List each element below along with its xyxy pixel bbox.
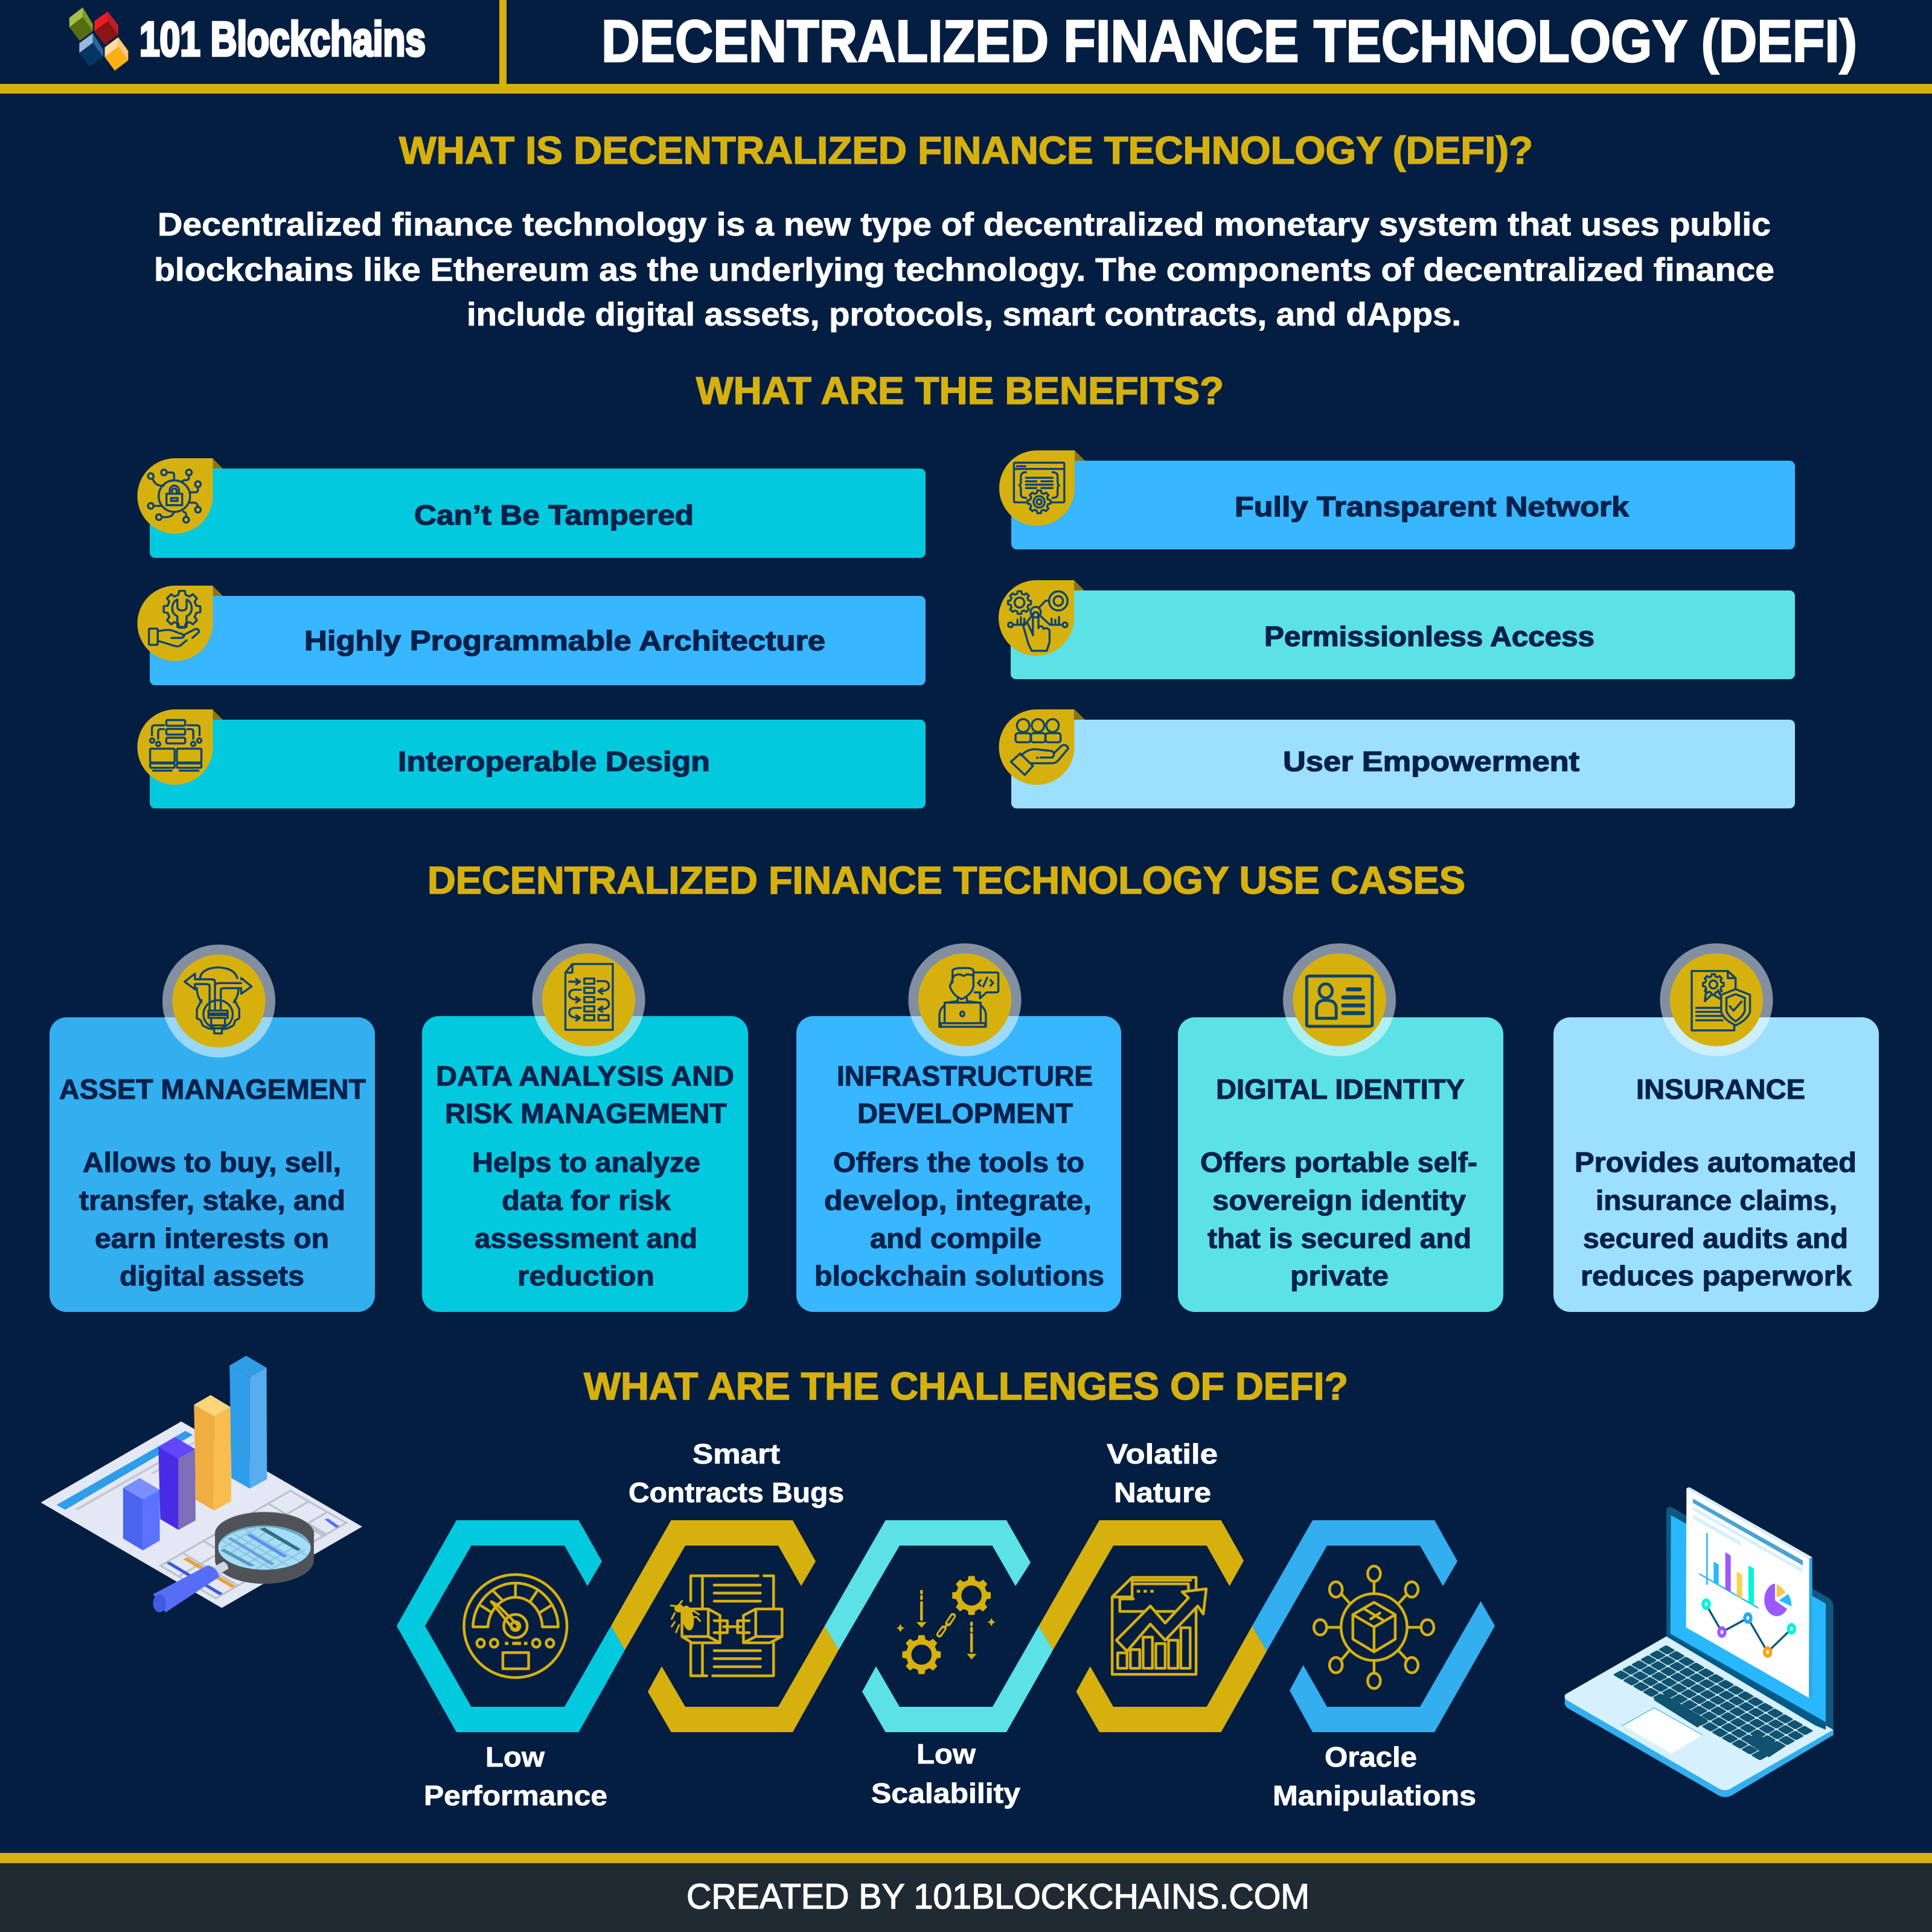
label: volatile nature — [1107, 1438, 1218, 1508]
icon: gears and chain — [897, 1576, 996, 1674]
icon: insurance document and shield — [1692, 971, 1750, 1031]
benefit: can't be tampered: Can’t Be Tampered — [414, 499, 694, 531]
hexagon: low performance — [397, 1520, 625, 1732]
benefit: permissionless: Permissionless Access — [1264, 621, 1595, 652]
logo — [69, 7, 426, 71]
card: infrastructure: develop, integrate, — [824, 1185, 1092, 1216]
logo wordmark: 101 Blockchains — [139, 12, 426, 66]
intro paragraph: Decentralized finance technology is a new type of decentralized monetary system that uses public — [158, 206, 1771, 243]
benefit: programmable: Highly Programmable Architecture — [304, 625, 825, 656]
benefit: user empowerment: User Empowerment — [1283, 746, 1579, 777]
label: volatile nature: Volatile — [1107, 1438, 1218, 1470]
label: low performance: Low — [485, 1741, 545, 1773]
intro paragraph — [154, 206, 1774, 333]
icon: document flow — [565, 964, 613, 1030]
card: data analysis: data for risk — [502, 1185, 671, 1216]
benefit: transparent — [999, 450, 1795, 549]
magnifier — [215, 1512, 314, 1584]
footer gold rule — [0, 1853, 1932, 1863]
card: asset management — [50, 944, 375, 1312]
label: low scalability: Scalability — [871, 1777, 1020, 1809]
panel: benefits — [138, 450, 1795, 808]
footer band — [0, 1863, 1932, 1932]
header divider — [499, 0, 507, 85]
card: asset management: Allows to buy, sell, — [83, 1147, 341, 1178]
illustration: isometric chart and magnifier — [41, 1356, 362, 1613]
card: asset management: transfer, stake, and — [79, 1185, 345, 1216]
benefit: permissionless — [999, 580, 1795, 679]
icon: browser with gear — [1014, 462, 1064, 513]
card: infrastructure: DEVELOPMENT — [857, 1098, 1073, 1129]
card: data analysis: Helps to analyze — [472, 1147, 700, 1178]
benefit: programmable — [138, 586, 926, 685]
label: low scalability — [871, 1738, 1020, 1809]
icon: speedometer — [464, 1575, 567, 1678]
footer credit: CREATED BY 101BLOCKCHAINS.COM — [686, 1877, 1310, 1916]
card: infrastructure: INFRASTRUCTURE — [837, 1060, 1093, 1092]
logo cubes — [69, 7, 128, 71]
label: oracle manipulations: Manipulations — [1273, 1780, 1476, 1811]
heading: benefits: WHAT ARE THE BENEFITS? — [696, 369, 1224, 412]
card: infrastructure: blockchain solutions — [814, 1260, 1104, 1291]
card: asset management: earn interests on — [95, 1223, 329, 1254]
card: data analysis: reduction — [517, 1260, 654, 1291]
header gold rule — [0, 84, 1932, 94]
heading: use cases: DECENTRALIZED FINANCE TECHNOLOGY USE CASES — [427, 859, 1465, 902]
benefit: interoperable: Interoperable Design — [398, 746, 710, 777]
heading: challenges: WHAT ARE THE CHALLENGES OF DEFI? — [584, 1364, 1348, 1408]
card: digital identity: DIGITAL IDENTITY — [1216, 1073, 1465, 1105]
icon: bulb with arrows — [185, 967, 252, 1034]
card: infrastructure: Offers the tools to — [833, 1147, 1084, 1178]
card: infrastructure: and compile — [870, 1223, 1041, 1254]
intro paragraph: blockchains like Ethereum as the underlying technology. The components of decentralized finance — [154, 252, 1774, 288]
label: smart contracts bugs: Contracts Bugs — [629, 1477, 844, 1508]
card: digital identity: private — [1290, 1260, 1389, 1291]
magnifier handle — [153, 1562, 228, 1613]
card: data analysis: RISK MANAGEMENT — [445, 1098, 727, 1129]
label: volatile nature: Nature — [1114, 1477, 1211, 1508]
card: digital identity: that is secured and — [1208, 1223, 1471, 1254]
card: asset management: ASSET MANAGEMENT — [59, 1073, 366, 1105]
hexagon: oracle manipulations — [1252, 1520, 1495, 1732]
header bar — [0, 0, 1932, 94]
card: digital identity — [1178, 943, 1503, 1312]
card: insurance: Provides automated — [1575, 1147, 1857, 1178]
card: insurance: INSURANCE — [1636, 1073, 1805, 1105]
label: oracle manipulations: Oracle — [1325, 1741, 1417, 1773]
trackpad — [1622, 1708, 1703, 1753]
card: data analysis: assessment and — [475, 1223, 697, 1254]
hexagon: volatile nature — [1039, 1520, 1267, 1732]
panel: challenges chain — [397, 1438, 1495, 1811]
label: oracle manipulations — [1273, 1741, 1476, 1811]
card: infrastructure — [796, 943, 1121, 1312]
panel: use cases — [50, 943, 1879, 1312]
label: low scalability: Low — [916, 1738, 976, 1770]
icon: id card — [1307, 976, 1372, 1026]
card: digital identity: sovereign identity — [1212, 1185, 1466, 1216]
benefit: can't be tampered — [138, 458, 926, 558]
card: insurance — [1553, 943, 1879, 1312]
heading: what is DeFi: WHAT IS DECENTRALIZED FINANCE TECHNOLOGY (DEFI)? — [399, 129, 1533, 172]
card: data analysis — [422, 943, 748, 1312]
icon: lock network — [148, 470, 200, 523]
card: insurance: insurance claims, — [1596, 1185, 1837, 1216]
card: asset management: digital assets — [120, 1260, 304, 1291]
icon: servers and monitors — [150, 720, 202, 770]
keyboard — [1612, 1645, 1814, 1761]
card: digital identity: Offers portable self- — [1200, 1147, 1477, 1178]
intro paragraph: include digital assets, protocols, smart contracts, and dApps. — [467, 296, 1461, 333]
benefit: user empowerment — [999, 709, 1795, 808]
card: insurance: reduces paperwork — [1581, 1260, 1852, 1291]
icon: volatile chart — [1112, 1578, 1206, 1674]
icon: hand touching nodes — [1008, 591, 1067, 651]
icon: gear wrench hand — [149, 591, 200, 647]
illustration: isometric laptop — [1564, 1487, 1834, 1797]
label: low performance — [424, 1741, 607, 1811]
label: smart contracts bugs: Smart — [693, 1438, 780, 1470]
icon: contracts with bug — [671, 1576, 782, 1676]
label: smart contracts bugs — [629, 1438, 844, 1508]
icon: developer at laptop — [939, 968, 999, 1027]
benefit: interoperable — [138, 709, 926, 808]
hexagon: low scalability — [825, 1520, 1053, 1732]
label: low performance: Performance — [424, 1780, 607, 1811]
benefit: transparent: Fully Transparent Network — [1235, 491, 1629, 522]
report sheet — [1686, 1487, 1812, 1698]
hexagon: smart contracts bugs — [611, 1520, 839, 1732]
icon: oracle network cube — [1314, 1566, 1434, 1689]
card: insurance: secured audits and — [1583, 1223, 1848, 1254]
footer — [0, 1853, 1932, 1932]
icon: people on hand — [1011, 719, 1068, 775]
card: data analysis: DATA ANALYSIS AND — [436, 1060, 734, 1092]
